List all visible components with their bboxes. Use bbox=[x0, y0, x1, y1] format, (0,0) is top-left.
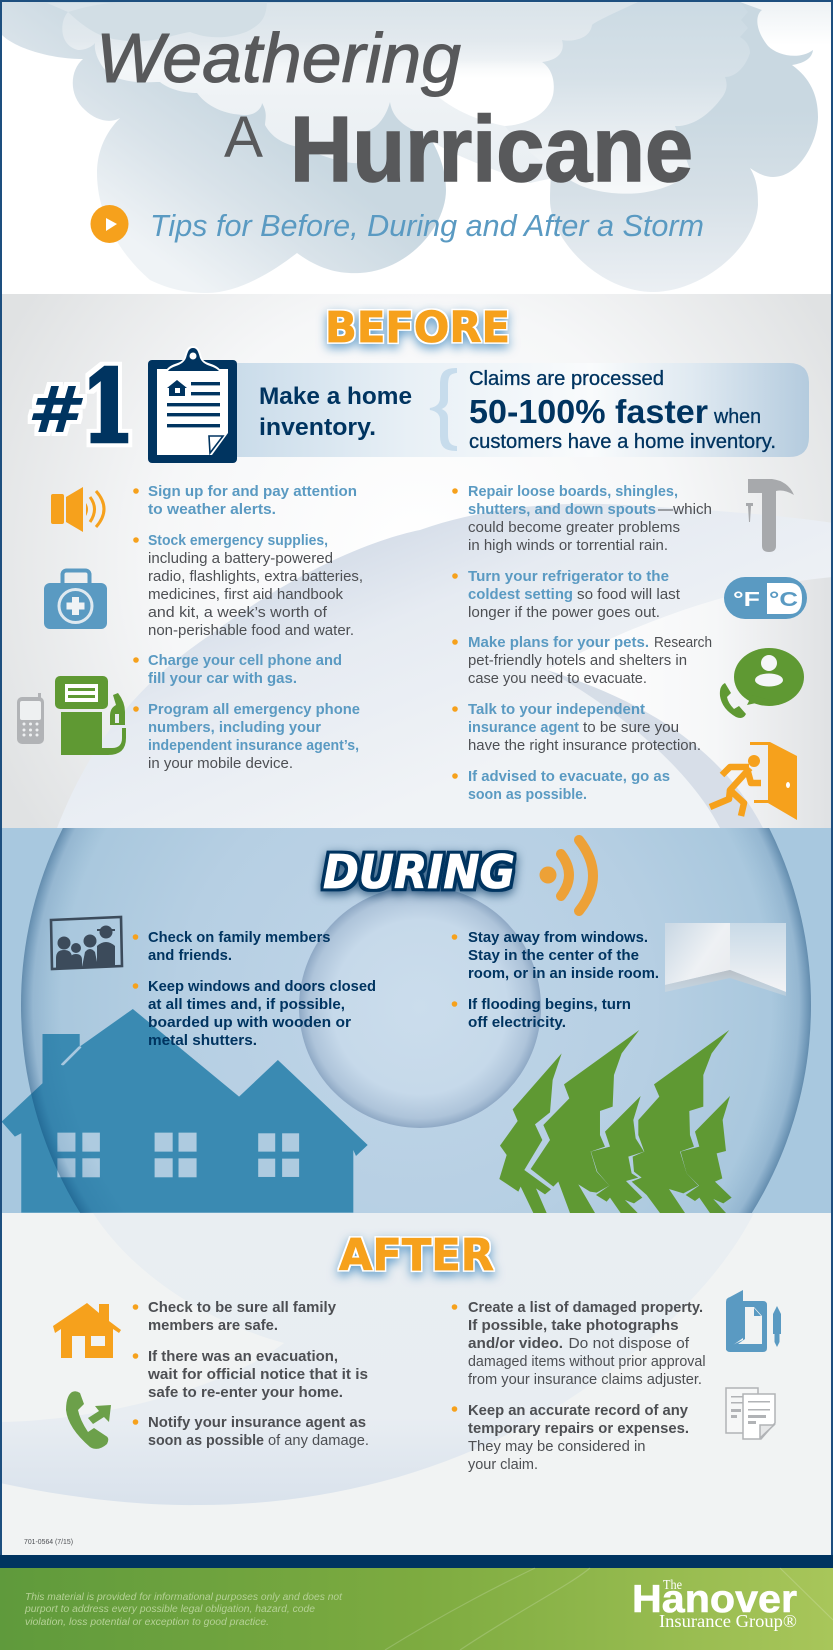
logo: The Hanover Insurance Group: Insurance Group® bbox=[659, 1611, 797, 1631]
text: after left column: If there was an evacuation, bbox=[148, 1348, 338, 1365]
text: after left column: Check to be sure all family bbox=[148, 1299, 337, 1316]
callout: claims faster: customers have a home inventory. bbox=[469, 431, 776, 453]
text: before right column: Make plans for your pets. bbox=[468, 634, 649, 651]
text: before left column: fill your car with gas. bbox=[148, 670, 297, 687]
callout: claims faster: 50-100% faster bbox=[469, 393, 708, 430]
heading: BEFORE: BEFORE bbox=[325, 303, 510, 353]
text: during right column: If flooding begins, turn bbox=[468, 996, 631, 1013]
text: during right column: room, or in an inside room. bbox=[468, 965, 659, 982]
logo: The Hanover Insurance Group: The bbox=[663, 1578, 682, 1593]
text: during right column: Stay in the center of the bbox=[468, 947, 639, 964]
text: before left column: numbers, including your bbox=[148, 719, 321, 736]
text: before right column: Repair loose boards, shingles, bbox=[468, 483, 678, 500]
text: before right column: Talk to your independent bbox=[468, 701, 645, 718]
text: before right column: have the right insurance protection. bbox=[468, 737, 701, 754]
text: before left column: Charge your cell phone and bbox=[148, 652, 342, 669]
number one bbox=[27, 350, 134, 465]
text: after right column: If possible, take photographs bbox=[468, 1317, 678, 1334]
text: before right column: pet-friendly hotels and shelters in bbox=[468, 652, 687, 669]
text: before right column: soon as possible. bbox=[468, 786, 587, 803]
text: after right column: and/or video. bbox=[468, 1335, 563, 1352]
ring edge shading bbox=[21, 828, 811, 1213]
heading: DURING: DURING bbox=[323, 845, 515, 899]
text: before left column: Sign up for and pay attention bbox=[148, 483, 357, 500]
icon: inside room corner bbox=[665, 923, 786, 996]
title: Weathering: Weathering bbox=[96, 19, 461, 97]
text: after left column: soon as possible bbox=[148, 1432, 264, 1449]
icon: thermostat: °F bbox=[733, 589, 760, 611]
text: before right column: shutters, and down spouts bbox=[468, 501, 656, 518]
text: before left column: Program all emergency phone bbox=[148, 701, 360, 718]
text: after right column: your claim. bbox=[468, 1456, 538, 1473]
icon: orange house bbox=[53, 1303, 121, 1358]
text: during left column: boarded up with wooden or bbox=[148, 1014, 351, 1031]
text: before right column bbox=[452, 483, 712, 803]
text: after right column: temporary repairs or expenses. bbox=[468, 1420, 689, 1437]
icon: thermostat bbox=[724, 577, 807, 619]
icon: play button bbox=[90, 205, 128, 243]
panel: before background bbox=[0, 294, 833, 828]
panel: during background and eye bbox=[2, 828, 831, 1213]
text: before right column: could become greater problems bbox=[468, 519, 680, 536]
text: before right column: —which bbox=[658, 501, 712, 518]
text: before right column: in high winds or torrential rain. bbox=[468, 537, 668, 554]
icon: hammer bbox=[746, 479, 794, 552]
panel: after background bbox=[0, 1213, 833, 1555]
banner: home inventory bbox=[237, 363, 809, 457]
icon: thermostat: °C bbox=[769, 589, 798, 611]
text: during left column: Check on family members bbox=[148, 929, 330, 946]
text: form number: 701-0564 (7/15) bbox=[24, 1537, 73, 1546]
callout: claims faster: when bbox=[713, 406, 761, 428]
icon: evacuation door and runner bbox=[710, 742, 797, 820]
text: before left column bbox=[133, 483, 363, 772]
text: after right column: Do not dispose of bbox=[568, 1335, 690, 1352]
subtitle: Tips for Before, During and After a Storm bbox=[150, 209, 704, 243]
text: after right column: Keep an accurate record of any bbox=[468, 1402, 689, 1419]
text: after left column: wait for official notice that it is bbox=[147, 1366, 368, 1383]
brace bbox=[430, 369, 456, 450]
text: during right column: Stay away from windows. bbox=[468, 929, 648, 946]
text: after right column: damaged items without prior approval bbox=[468, 1353, 706, 1370]
text: during left column: metal shutters. bbox=[148, 1032, 257, 1049]
icon: folder with pen bbox=[726, 1290, 781, 1352]
text: disclaimer: purport to address every possible legal obligation, hazard, code bbox=[24, 1604, 315, 1615]
text: during left column: at all times and, if possible, bbox=[148, 996, 345, 1013]
text: before left column: Stock emergency supplies, bbox=[148, 532, 328, 549]
text: before right column: longer if the power goes out. bbox=[468, 604, 660, 621]
text: after right column bbox=[452, 1299, 706, 1473]
text: disclaimer: violation, loss potential or exception to good practice. bbox=[25, 1617, 269, 1628]
icon: family photo bbox=[51, 917, 122, 969]
text: before left column: and kit, a week’s worth of bbox=[148, 604, 328, 621]
icon: agent speech bubble and phone bbox=[720, 648, 804, 718]
icon: speaker bbox=[51, 487, 104, 532]
icon: clipboard bbox=[148, 346, 237, 463]
text: before right column: Turn your refrigerator to the bbox=[468, 568, 669, 585]
text: disclaimer: This material is provided for informational purposes only and does not bbox=[25, 1592, 343, 1603]
icon: first aid kit bbox=[44, 570, 107, 629]
text: before right column: to be sure you bbox=[583, 719, 679, 736]
band: navy bbox=[0, 1555, 833, 1568]
header background clouds bbox=[0, 0, 833, 294]
text: after right column: Create a list of damaged property. bbox=[468, 1299, 703, 1316]
text: during left column: and friends. bbox=[148, 947, 232, 964]
text: make a home inventory: Make a home bbox=[259, 383, 412, 410]
text: after left column: members are safe. bbox=[148, 1317, 278, 1334]
text: after left column: safe to re-enter your home. bbox=[148, 1384, 343, 1401]
text: before left column: radio, flashlights, extra batteries, bbox=[148, 568, 363, 585]
footer: green panel bbox=[0, 1568, 833, 1650]
text: after right column: from your insurance claims adjuster. bbox=[468, 1371, 702, 1388]
text: after right column: They may be considered in bbox=[468, 1438, 646, 1455]
text: disclaimer bbox=[24, 1592, 343, 1628]
heading: AFTER: AFTER bbox=[339, 1230, 494, 1281]
text: before right column: If advised to evacuate, go as bbox=[468, 768, 670, 785]
logo: The Hanover Insurance Group: Hanover bbox=[632, 1578, 797, 1621]
text: before left column: to weather alerts. bbox=[148, 501, 276, 518]
illustration: bent trees bbox=[499, 1030, 732, 1213]
text: during left column bbox=[133, 929, 376, 1049]
illustration: house bbox=[2, 1009, 368, 1213]
text: during right column: off electricity. bbox=[468, 1014, 566, 1031]
text: after left column: Notify your insurance agent as bbox=[148, 1414, 366, 1431]
text: before left column: non-perishable food and water. bbox=[148, 622, 354, 639]
text: before left column: medicines, first aid handbook bbox=[148, 586, 343, 603]
text: make a home inventory bbox=[259, 383, 412, 441]
icon: sound waves bbox=[540, 840, 593, 911]
callout: claims faster: Claims are processed bbox=[469, 368, 664, 390]
text: make a home inventory: inventory. bbox=[259, 414, 376, 441]
text: before right column: case you need to evacuate. bbox=[468, 670, 647, 687]
number one: 1 bbox=[82, 350, 134, 465]
icon: paper documents bbox=[726, 1388, 775, 1439]
title: A: A bbox=[224, 105, 263, 170]
text: after left column: of any damage. bbox=[268, 1432, 369, 1449]
number one: # bbox=[27, 374, 83, 448]
text: during left column: Keep windows and doors closed bbox=[148, 978, 376, 995]
icon: gas pump bbox=[55, 676, 126, 755]
callout: claims faster bbox=[469, 368, 776, 453]
text: before left column: independent insurance agent’s, bbox=[148, 737, 359, 754]
text: before right column: insurance agent bbox=[468, 719, 579, 736]
text: before right column: Research bbox=[654, 634, 712, 651]
text: after left column bbox=[133, 1299, 369, 1449]
text: before right column: so food will last bbox=[577, 586, 681, 603]
text: before left column: in your mobile device. bbox=[148, 755, 293, 772]
icon: phone with arrow bbox=[66, 1391, 111, 1449]
title: Hurricane: Hurricane bbox=[290, 97, 693, 201]
icon: cell phone bbox=[17, 693, 44, 744]
text: during right column bbox=[452, 929, 659, 1031]
text: before left column: including a battery-powered bbox=[148, 550, 333, 567]
text: before right column: coldest setting bbox=[468, 586, 573, 603]
